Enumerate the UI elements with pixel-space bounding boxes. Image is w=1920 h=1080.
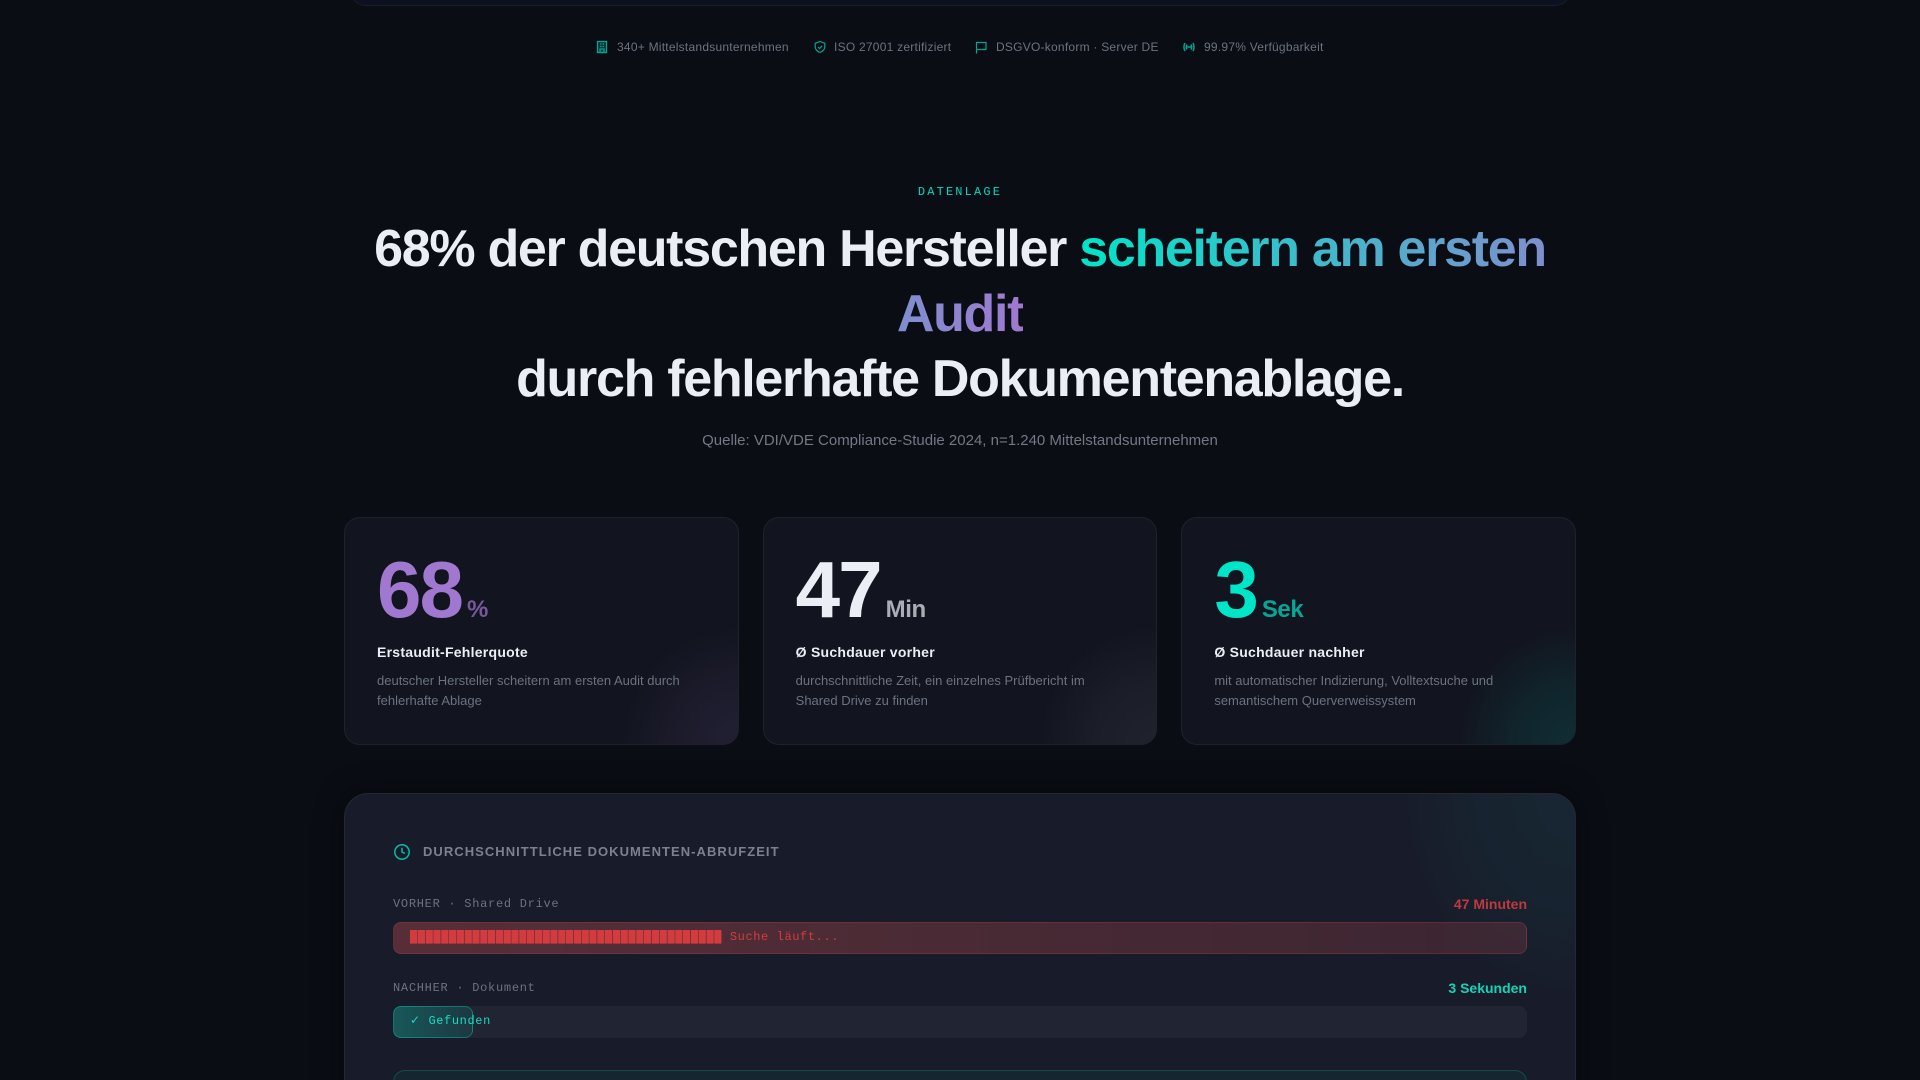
- trust text: customers: 340+ Mittelstandsunternehmen: [617, 40, 789, 54]
- panel: stat 3 seconds: [1181, 517, 1576, 745]
- stat label: Ø Suchdauer nachher: [1214, 644, 1365, 660]
- after value: 3 Sekunden: [1448, 980, 1527, 996]
- panel: stat 68 percent: [344, 517, 739, 745]
- stat label: Ø Suchdauer vorher: [796, 644, 935, 660]
- after bar track: [393, 1006, 1527, 1038]
- headline: 68% der deutschen Hersteller scheitern am ersten Audit: [374, 220, 1546, 343]
- before value: 47 Minuten: [1454, 896, 1527, 912]
- icon: shield: [814, 40, 826, 53]
- icon: clock: [394, 844, 410, 860]
- headline: durch fehlerhafte Dokumentenablage.: [516, 350, 1404, 408]
- after bar fill: [393, 1006, 473, 1038]
- after label: NACHHER · Dokument: [393, 981, 536, 995]
- panel: stat 47 minutes: [763, 517, 1157, 745]
- stat number: 3Sek: [1214, 545, 1303, 634]
- panel heading: DURCHSCHNITTLICHE DOKUMENTEN-ABRUFZEIT: [423, 844, 780, 859]
- stat description: mit automatischer Indizierung, Volltextsuche und semantischem Querverweissystem: [1214, 673, 1493, 708]
- before bar: ████████████████████████████████████████ Suche läuft...: [410, 930, 839, 944]
- trust text: uptime: 99.97% Verfügbarkeit: [1204, 40, 1324, 54]
- insight box: [393, 1070, 1527, 1080]
- stat description: deutscher Hersteller scheitern am ersten Audit durch fehlerhafte Ablage: [377, 673, 680, 708]
- trust text: iso: ISO 27001 zertifiziert: [834, 40, 951, 54]
- source line: Quelle: VDI/VDE Compliance-Studie 2024, n=1.240 Mittelstandsunternehmen: [702, 432, 1218, 449]
- section eyebrow: DATENLAGE: [918, 185, 1002, 199]
- before bar: [393, 922, 1527, 954]
- stat label: Erstaudit-Fehlerquote: [377, 644, 528, 660]
- icon: building: [596, 40, 608, 54]
- top card edge: [350, 0, 1571, 6]
- panel: retrieval time comparison: [344, 793, 1576, 1080]
- stat description: durchschnittliche Zeit, ein einzelnes Prüfbericht im Shared Drive zu finden: [796, 673, 1085, 708]
- trust text: gdpr: DSGVO-konform · Server DE: [996, 40, 1159, 54]
- icon: uptime signal: [1183, 42, 1195, 52]
- after bar fill: ✓ Gefunden: [410, 1014, 491, 1028]
- headline: [374, 220, 1546, 408]
- before label: VORHER · Shared Drive: [393, 897, 559, 911]
- icon: flag: [976, 42, 987, 54]
- stat number: 68%: [377, 545, 488, 634]
- stat number: 47Min: [796, 545, 926, 634]
